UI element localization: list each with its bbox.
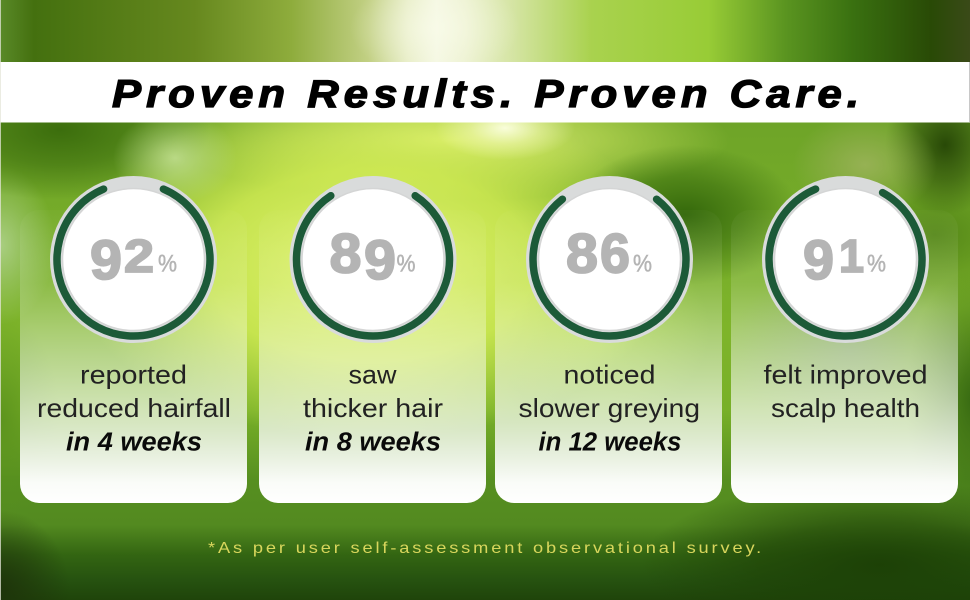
caption: saw thicker hair in 8 weeks: in 8 weeks [305, 428, 441, 456]
caption: felt improved scalp health: felt improved [764, 360, 928, 390]
caption: noticed slower greying in 12 weeks: in 12 weeks [538, 428, 682, 456]
ring gauge: 92%: 9 [90, 228, 122, 291]
caption: felt improved scalp health [764, 360, 928, 423]
caption: saw thicker hair in 8 weeks: thicker hair [303, 393, 443, 423]
ring gauge: 89%: 9 [364, 228, 396, 291]
caption: saw thicker hair in 8 weeks: saw [348, 360, 397, 390]
caption: noticed slower greying in 12 weeks: noticed [564, 360, 656, 390]
caption: felt improved scalp health: scalp health [771, 393, 920, 423]
background: top strip above banner [0, 0, 970, 62]
title: Proven Results. Proven Care. [112, 73, 864, 116]
card: 91 percent [731, 210, 958, 503]
caption: noticed slower greying in 12 weeks [518, 360, 700, 456]
ring gauge: 86%: % [633, 250, 652, 278]
ring gauge: 89%: % [396, 250, 416, 278]
caption: reported reduced hairfall in 4 weeks: reduced hairfall [37, 393, 231, 423]
ring gauge: 89% [290, 176, 456, 343]
caption: reported reduced hairfall in 4 weeks: in 4 weeks [66, 428, 202, 456]
ring gauge: 91%: 9 [803, 228, 834, 291]
ring gauge: 89%: 8 [330, 222, 362, 284]
footnote: *As per user self-assessment observational survey. [208, 540, 764, 557]
ring gauge: 92%: % [158, 250, 177, 278]
title banner [0, 62, 970, 122]
ring gauge: 91% [762, 176, 929, 343]
caption: saw thicker hair in 8 weeks [303, 360, 443, 456]
ring gauge: 92%: 2 [124, 230, 154, 282]
ring gauge: 86% [526, 176, 693, 343]
ring gauge: 86%: 8 [566, 222, 598, 284]
card: 86 percent [495, 210, 722, 503]
caption: reported reduced hairfall in 4 weeks: reported [80, 360, 187, 390]
ring gauge: 91%: % [867, 250, 886, 278]
caption: reported reduced hairfall in 4 weeks [37, 360, 231, 456]
card: 89 percent [259, 210, 486, 503]
ring gauge: 92% [50, 176, 217, 343]
card: 92 percent [20, 210, 247, 503]
ring gauge: 91%: 1 [839, 230, 864, 282]
caption: noticed slower greying in 12 weeks: slower greying [518, 393, 700, 423]
ring gauge: 86%: 6 [600, 222, 630, 284]
